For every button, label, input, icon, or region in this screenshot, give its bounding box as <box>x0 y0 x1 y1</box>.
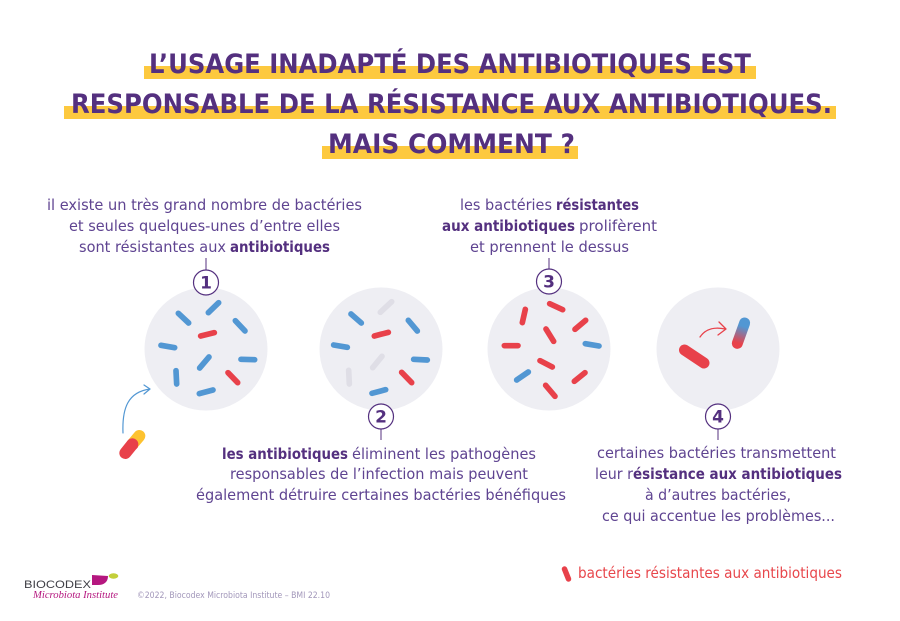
title: L’USAGE INADAPTÉ DES ANTIBIOTIQUES EST <box>149 48 752 80</box>
resistant bacterium <box>684 350 704 363</box>
step 1: number badge <box>194 258 218 295</box>
text block: step 3 <box>442 196 657 256</box>
text block: step 4: leur r <box>595 465 634 483</box>
step 4: number badge: 4 <box>712 408 724 428</box>
step 2: petri dish <box>320 288 442 410</box>
text block: step 4: à d’autres bactéries, <box>645 486 791 504</box>
step 3: petri dish <box>488 288 610 410</box>
footer: copyright: ©2022, Biocodex Microbiota Institute – BMI 22.10 <box>137 591 330 601</box>
text block: step 2: éliminent les pathogènes <box>352 445 536 463</box>
text block: step 1: et seules quelques-unes d’entre elles <box>69 217 340 235</box>
icon: antibiotic capsule <box>125 436 139 453</box>
logo: Biocodex Microbiota Institute <box>24 573 119 601</box>
bacteria group 2 <box>334 302 427 393</box>
step 3: number badge <box>536 258 562 294</box>
transforming bacterium <box>737 323 745 343</box>
title: RESPONSABLE DE LA RÉSISTANCE AUX ANTIBIOTIQUES. <box>71 88 832 120</box>
title <box>64 48 836 160</box>
text block: step 3: prolifèrent <box>579 217 657 235</box>
text block: step 3: aux antibiotiques <box>442 217 575 235</box>
step 1: number badge: 1 <box>200 274 212 294</box>
transfer arrow <box>700 322 726 337</box>
text block: step 3: et prennent le dessus <box>470 238 629 256</box>
title: MAIS COMMENT ? <box>328 129 575 160</box>
step 4: number badge <box>706 404 730 440</box>
text block: step 1: il existe un très grand nombre de bactéries <box>47 196 362 214</box>
text block: step 4: certaines bactéries transmettent <box>597 444 836 462</box>
step 2: number badge <box>368 404 394 440</box>
text block: step 1: sont résistantes aux <box>79 238 226 256</box>
step 3: number badge: 3 <box>543 272 555 292</box>
text block: step 2: également détruire certaines bactéries bénéfiques <box>196 486 566 504</box>
arrow: antibiotic to dish <box>123 385 150 433</box>
text block: step 1: antibiotiques <box>230 238 330 256</box>
bacteria group 1 <box>161 303 255 394</box>
text block: step 3: les bactéries <box>460 196 552 214</box>
text block: step 1 <box>47 196 362 256</box>
logo: Biocodex Microbiota Institute: Microbiota Institute <box>32 590 119 601</box>
text block: step 2: responsables de l’infection mais peuvent <box>230 465 528 483</box>
text block: step 3: résistantes <box>556 196 639 214</box>
text block: step 2 <box>196 445 566 504</box>
logo: Biocodex Microbiota Institute: BIOCODEX <box>24 579 92 591</box>
text block: step 4 <box>595 444 842 525</box>
step 1: petri dish <box>144 288 268 410</box>
step 2: number badge: 2 <box>375 408 387 428</box>
text block: step 2: les antibiotiques <box>222 445 348 463</box>
legend: resistant bacteria: bactéries résistantes aux antibiotiques <box>578 564 842 582</box>
step 4: petri dish <box>656 288 780 410</box>
bacteria group 3 <box>504 304 599 396</box>
text block: step 4: ésistance aux antibiotiques <box>633 465 842 483</box>
text block: step 4: ce qui accentue les problèmes... <box>602 507 835 525</box>
